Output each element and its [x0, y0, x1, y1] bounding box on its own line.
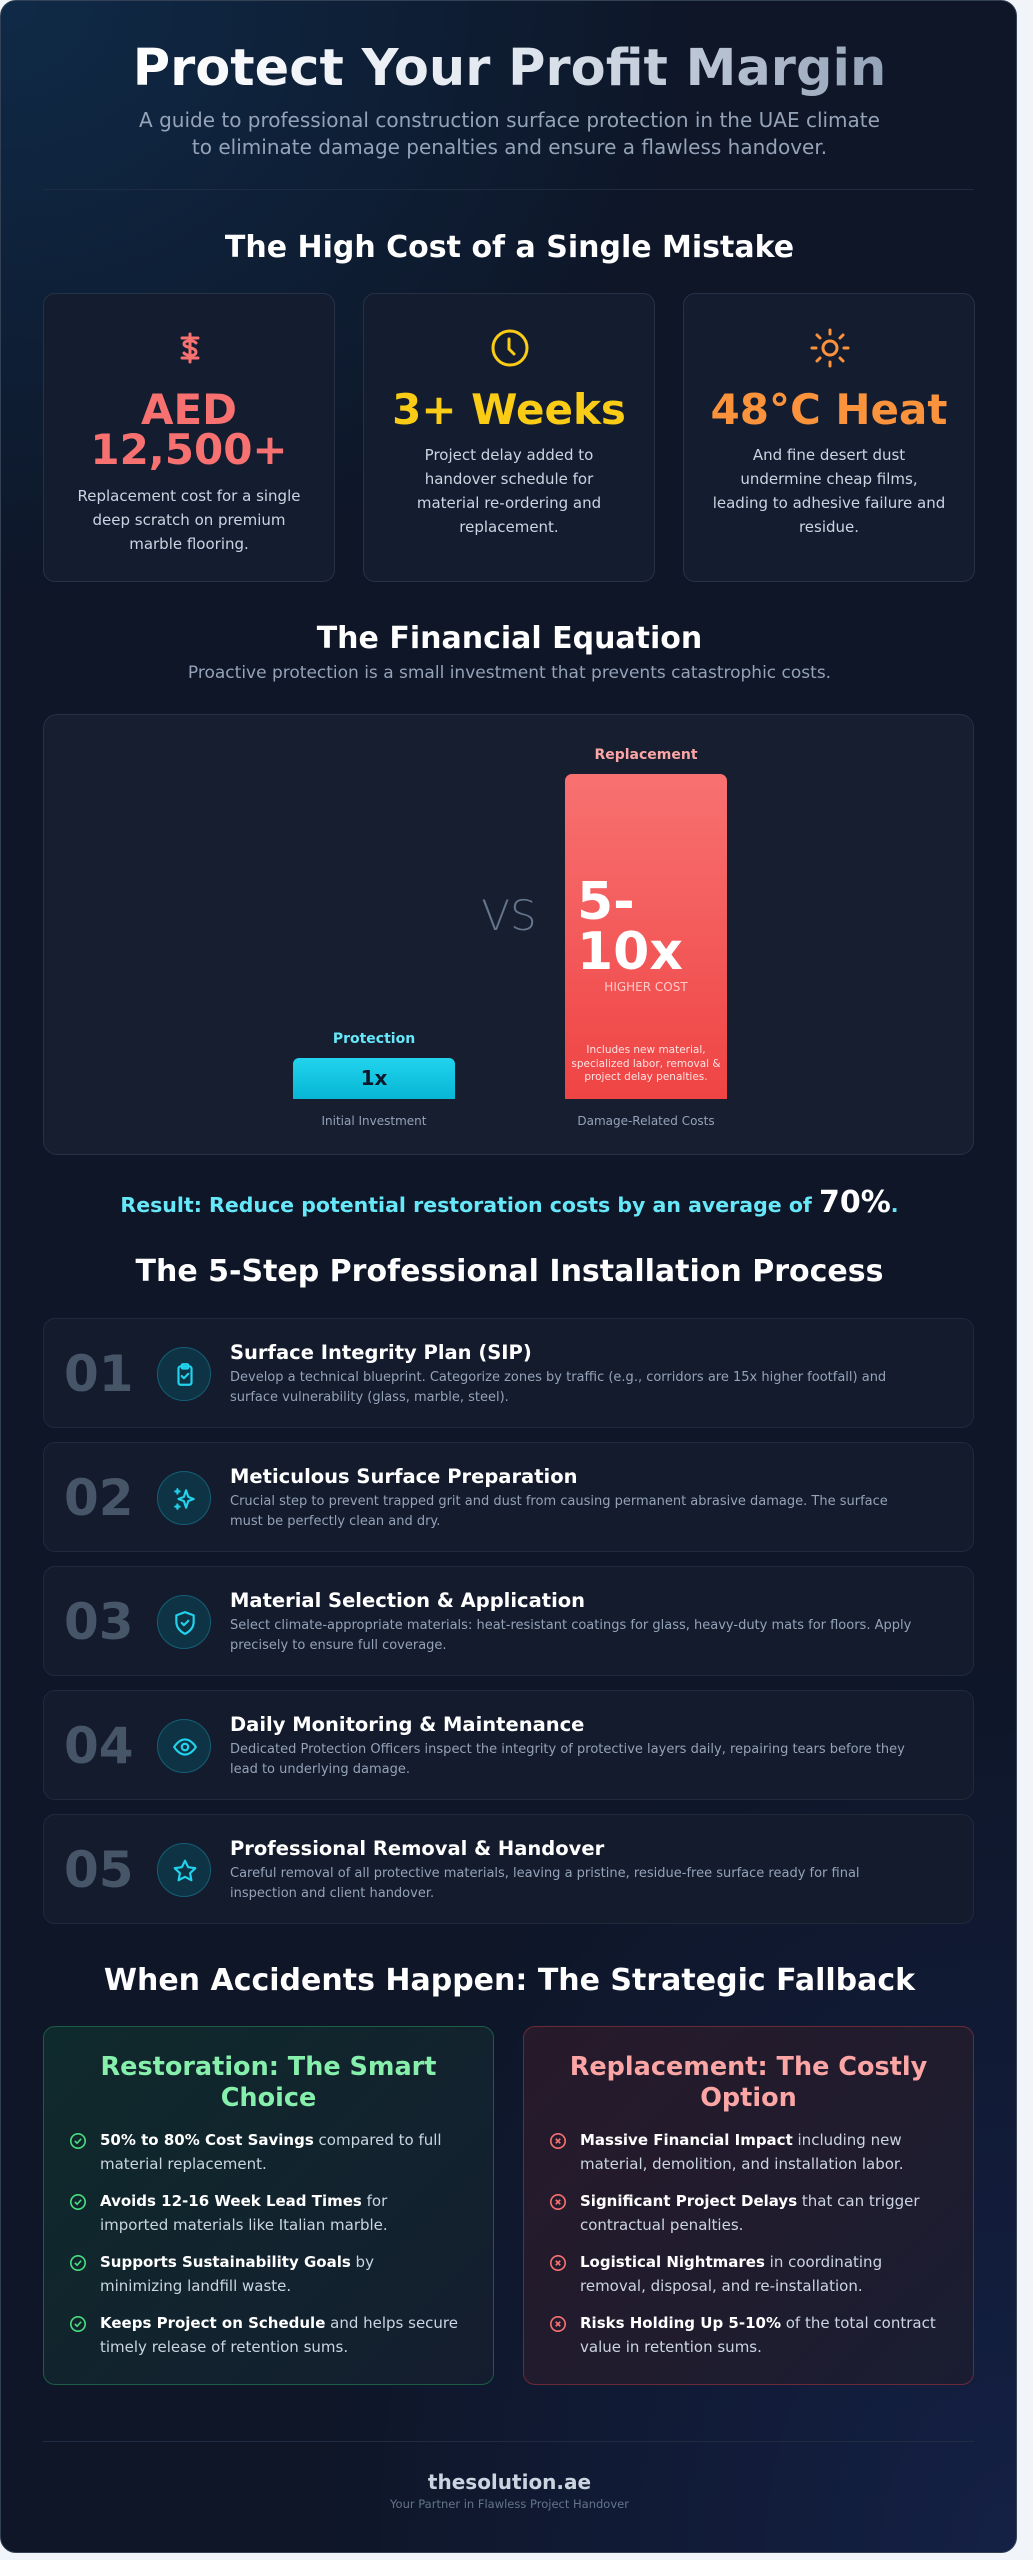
step 2: Crucial step to prevent trapped grit and dust from causing permanent abrasive damage. The surface — [230, 1494, 888, 1509]
result callout: Result: Reduce potential restoration costs by an average of 70%. — [120, 1185, 899, 1220]
panel: restoration: Supports Sustainability Goals by — [100, 2253, 374, 2271]
stat card: heat: residue. — [799, 518, 859, 536]
panel: restoration: imported materials like Italian marble. — [100, 2216, 388, 2234]
axis labels: Initial Investment — [322, 1114, 426, 1128]
stat card: AED: marble flooring. — [129, 535, 249, 553]
icon: currency — [180, 332, 200, 364]
icon: star — [157, 1843, 211, 1897]
stat card: AED: deep scratch on premium — [92, 511, 286, 529]
step 2: 02 — [64, 1469, 134, 1527]
stat card: weeks — [363, 293, 655, 582]
label: protection: Protection — [333, 1031, 415, 1047]
stat card: AED — [43, 293, 335, 582]
step 5: Careful removal of all protective materials, leaving a pristine, residue-free surface ready for final — [230, 1866, 860, 1881]
icon: shield — [157, 1595, 211, 1649]
step 2: Meticulous Surface Preparation — [230, 1465, 578, 1488]
stat card: AED: 12,500+ — [90, 425, 288, 474]
icon: eye — [157, 1719, 211, 1773]
step 4: lead to underlying damage. — [230, 1762, 410, 1777]
step 5: 05 — [64, 1841, 134, 1899]
stat card: heat: And fine desert dust — [753, 446, 905, 464]
bar: replacement — [565, 774, 727, 1099]
panel: restoration: timely release of retention sums. — [100, 2338, 348, 2356]
heading: fallback: When Accidents Happen: The Strategic Fallback — [104, 1963, 915, 1998]
bar: replacement: HIGHER COST — [604, 980, 688, 994]
stat card: heat — [683, 293, 975, 582]
icon: sparkles — [157, 1471, 211, 1525]
panel: replacement: contractual penalties. — [580, 2216, 743, 2234]
heading: financial equation: The Financial Equation — [317, 621, 702, 656]
stat card: weeks: 3+ Weeks — [392, 385, 626, 434]
panel: restoration: minimizing landfill waste. — [100, 2277, 291, 2295]
subheading: Proactive protection is a small investment that prevents catastrophic costs. — [188, 663, 831, 683]
step 3 — [43, 1566, 974, 1676]
step 4 — [43, 1690, 974, 1800]
bar: replacement: Includes new material, specialized labor, removal & project delay penalties. — [571, 1044, 721, 1083]
panel: replacement: Massive Financial Impact including new — [580, 2131, 902, 2149]
panel: replacement: Logistical Nightmares in coordinating — [580, 2253, 882, 2271]
panel: restoration: Restoration: The Smart Choice — [101, 2052, 436, 2113]
icon: clock — [492, 330, 528, 366]
stat card: weeks: material re-ordering and — [417, 494, 601, 512]
step 1: Develop a technical blueprint. Categorize zones by traffic (e.g., corridors are 15x higher footfall) and — [230, 1370, 886, 1385]
label: replacement: Replacement — [594, 747, 698, 763]
bar: replacement: 5- — [577, 872, 635, 932]
subtitle: to eliminate damage penalties and ensure a flawless handover. — [192, 135, 827, 159]
step 2 — [43, 1442, 974, 1552]
footer brand: thesolution.ae — [428, 2470, 591, 2494]
heading: high cost: The High Cost of a Single Mistake — [225, 230, 794, 265]
chart panel — [43, 714, 974, 1155]
title: Protect Your Profit Margin — [133, 39, 886, 98]
heading: process: The 5-Step Professional Installation Process — [136, 1254, 883, 1289]
icon: sun — [810, 328, 850, 368]
step 3: 03 — [64, 1593, 134, 1651]
step 4: Daily Monitoring & Maintenance — [230, 1713, 584, 1736]
step 4: 04 — [64, 1717, 134, 1775]
stat card: weeks: handover schedule for — [425, 470, 593, 488]
footer tagline: Your Partner in Flawless Project Handover — [390, 2497, 629, 2511]
panel: replacement: Significant Project Delays that can trigger — [580, 2192, 920, 2210]
step 2: must be perfectly clean and dry. — [230, 1514, 440, 1529]
stat card: weeks: Project delay added to — [425, 446, 593, 464]
step 5 — [43, 1814, 974, 1924]
stat card: heat: leading to adhesive failure and — [713, 494, 945, 512]
bar: protection — [293, 1058, 455, 1099]
panel: replacement: material, demolition, and installation labor. — [580, 2155, 903, 2173]
step 1: 01 — [64, 1345, 134, 1403]
chart panel: Damage-Related Costs — [577, 1114, 715, 1128]
subtitle — [139, 108, 880, 159]
panel: restoration: material replacement. — [100, 2155, 267, 2173]
panel: replacement: value in retention sums. — [580, 2338, 762, 2356]
panel: replacement — [523, 2026, 974, 2385]
panel: restoration: Avoids 12-16 Week Lead Times for — [100, 2192, 387, 2210]
stat card: heat: undermine cheap films, — [740, 470, 918, 488]
icon: clipboard — [157, 1347, 211, 1401]
step 4: Dedicated Protection Officers inspect the integrity of protective layers daily, repairing tears before they — [230, 1742, 905, 1757]
step 3: precisely to ensure full coverage. — [230, 1638, 447, 1653]
step 1: Surface Integrity Plan (SIP) — [230, 1341, 532, 1364]
panel: restoration — [43, 2026, 494, 2385]
step 5: inspection and client handover. — [230, 1886, 434, 1901]
subtitle: A guide to professional construction surface protection in the UAE climate — [139, 108, 880, 132]
vs: VS — [481, 891, 537, 940]
step 3: Material Selection & Application — [230, 1589, 585, 1612]
panel: replacement: Replacement: The Costly Option — [570, 2052, 927, 2113]
step 5: Professional Removal & Handover — [230, 1837, 604, 1860]
panel: restoration: Keeps Project on Schedule and helps secure — [100, 2314, 458, 2332]
step 3: Select climate-appropriate materials: heat-resistant coatings for glass, heavy-duty mats for floors. Apply — [230, 1618, 911, 1633]
step 1 — [43, 1318, 974, 1428]
step 1: surface vulnerability (glass, marble, steel). — [230, 1390, 509, 1405]
panel: replacement: Risks Holding Up 5-10% of the total contract — [580, 2314, 936, 2332]
bar: replacement: 10x — [577, 922, 683, 982]
panel: replacement: removal, disposal, and re-installation. — [580, 2277, 863, 2295]
stat card: heat: 48°C Heat — [711, 385, 947, 434]
bar: protection: 1x — [361, 1066, 387, 1090]
stat card: AED: Replacement cost for a single — [78, 487, 300, 505]
stat card: weeks: replacement. — [459, 518, 559, 536]
stat card: AED: AED — [141, 385, 237, 434]
panel: restoration: 50% to 80% Cost Savings compared to full — [100, 2131, 442, 2149]
